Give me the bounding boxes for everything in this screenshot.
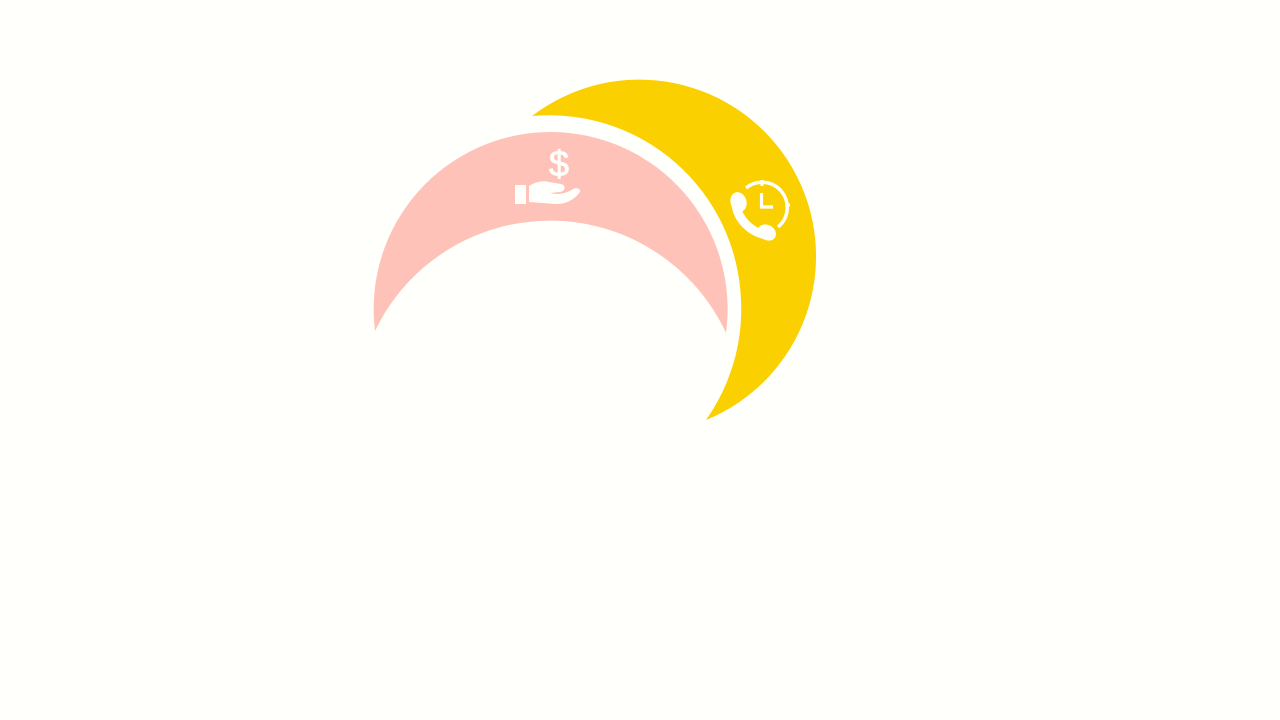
icon: phone and clock — [728, 180, 790, 244]
yellow crescent panel — [532, 80, 816, 420]
icon: hand holding dollar — [515, 143, 580, 204]
pink crescent panel — [374, 132, 728, 333]
icon: hand holding dollar: $ — [549, 143, 569, 184]
